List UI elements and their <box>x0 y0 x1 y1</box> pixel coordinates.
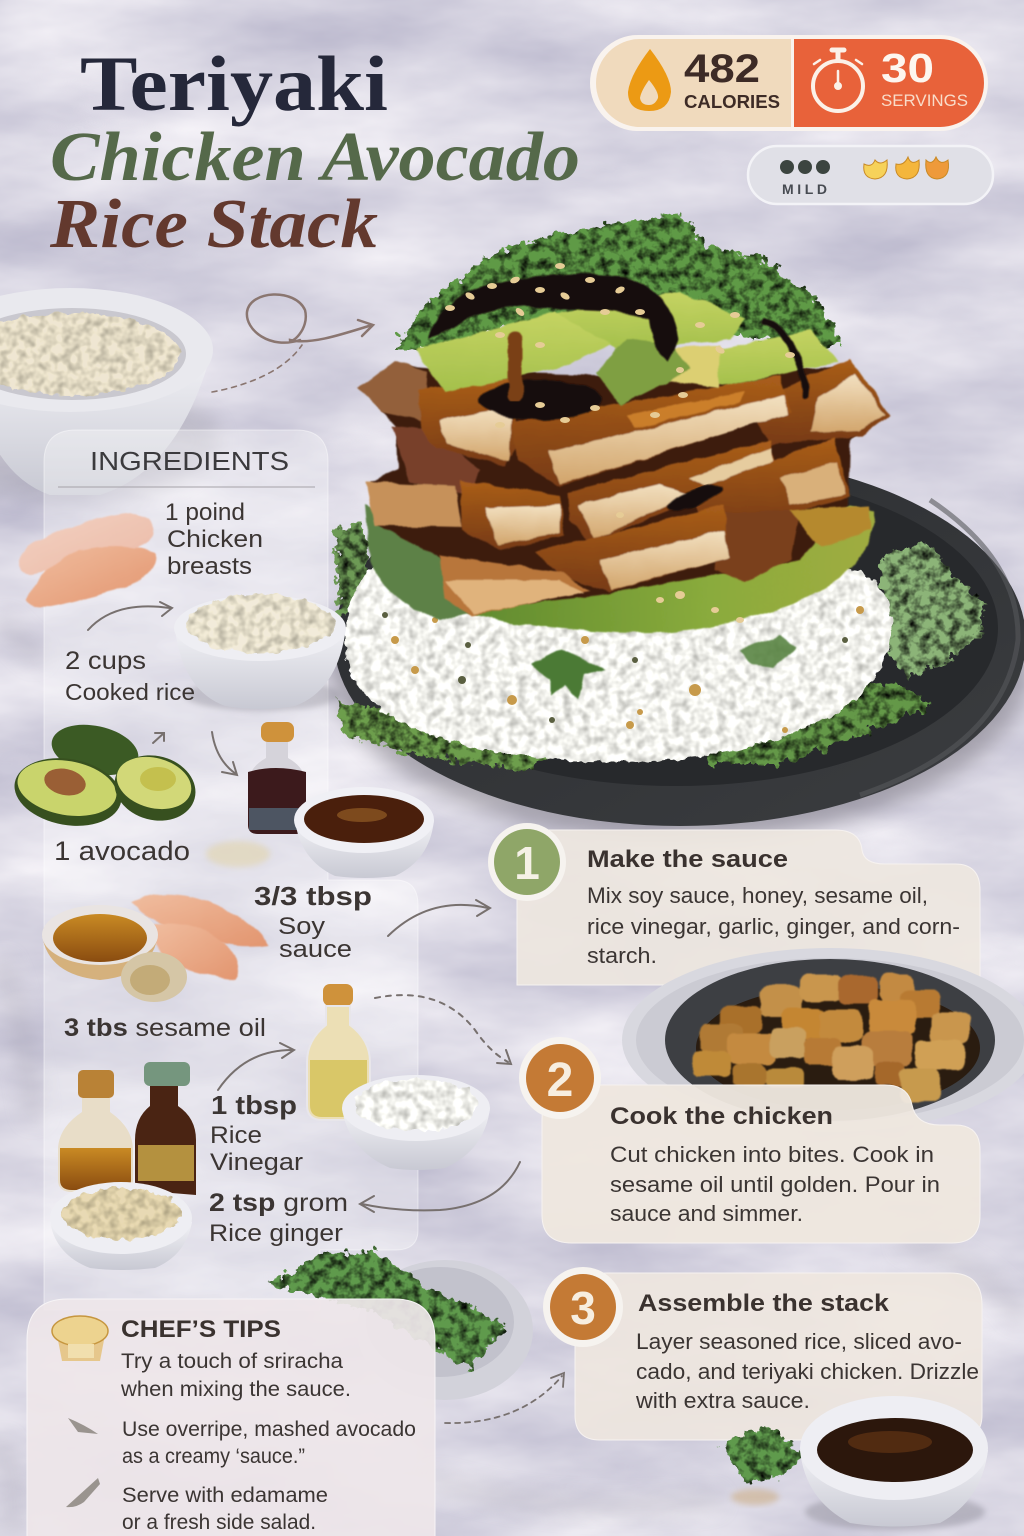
icon: stopwatch <box>813 50 863 111</box>
icon: avocados <box>9 717 203 834</box>
chicken stack <box>358 358 890 616</box>
middle layer pieces <box>366 482 462 528</box>
title: Rice Stack <box>49 186 378 263</box>
icon: bowl of rice <box>174 595 346 711</box>
teriyaki drizzle <box>428 274 806 395</box>
body: sauce and simmer. <box>610 1201 803 1226</box>
badge 1: 1 <box>514 837 540 889</box>
large piece, top layer <box>512 376 792 486</box>
icon: chicken and honey bowl <box>42 894 268 1002</box>
body: sesame oil until golden. Pour in <box>610 1172 940 1197</box>
icon: oil bottle <box>307 984 370 1120</box>
text: chicken breasts: Chicken <box>167 526 263 553</box>
heading: Assemble the stack <box>638 1290 890 1317</box>
text: rice vinegar <box>210 1090 303 1176</box>
text: soy sauce <box>254 881 372 963</box>
tip 1: Try a touch of sriracha <box>121 1350 343 1373</box>
rice mound <box>345 555 892 762</box>
herb crown <box>392 212 845 350</box>
text: cooked rice: 2 cups <box>65 647 146 675</box>
rice bowl, top left <box>0 288 220 500</box>
icon: flame <box>628 49 671 111</box>
text: sesame oil: 3 tbs sesame oil <box>64 1014 266 1042</box>
text: rice vinegar: Vinegar <box>210 1149 303 1176</box>
tip 3 <box>122 1484 328 1534</box>
tip 2: Use overripe, mashed avocado <box>122 1418 416 1441</box>
heading: Cook the chicken <box>610 1103 833 1130</box>
tip 3: Serve with edamame <box>122 1484 328 1507</box>
tip 2 <box>122 1418 416 1468</box>
calories value <box>684 47 780 112</box>
text: rice vinegar: Rice <box>210 1122 262 1149</box>
text: rice ginger: Rice ginger <box>209 1220 343 1247</box>
tip 3: or a fresh side salad. <box>122 1511 316 1534</box>
icon: sauce bowl <box>294 787 434 878</box>
servings value <box>881 45 968 110</box>
left piece, top layer <box>418 378 518 466</box>
arrow: oil to vinegar <box>218 1043 294 1090</box>
body <box>587 883 960 968</box>
badge 2 <box>519 1037 601 1119</box>
tip 1 <box>120 1350 351 1401</box>
sesame seeds <box>445 263 795 623</box>
green layer and avocado slice <box>365 505 480 620</box>
stat pill: calories and time <box>590 35 988 131</box>
badge 2: 2 <box>547 1054 573 1107</box>
panel: step 1 make the sauce <box>488 823 980 985</box>
tip 1: when mixing the sauce. <box>120 1378 351 1401</box>
body <box>610 1142 940 1226</box>
arrow: step 2 to ginger <box>360 1162 520 1212</box>
dish: teriyaki chicken avocado rice stack <box>335 212 985 772</box>
herb plate <box>265 1250 533 1400</box>
body: Cut chicken into bites. Cook in <box>610 1142 934 1167</box>
icon: pan of cooked chicken <box>622 948 1024 1132</box>
mild dots and label <box>780 160 830 197</box>
panel: ingredients background <box>44 430 418 1310</box>
body: rice vinegar, garlic, ginger, and corn- <box>587 914 960 939</box>
title <box>49 40 580 263</box>
spice pile <box>206 841 270 867</box>
arrows near avocado and soy bottle <box>153 732 237 775</box>
rice specks and herb flecks <box>382 606 864 733</box>
text: cooked rice: Cooked rice <box>65 679 195 705</box>
text: cooked rice <box>65 647 195 705</box>
icon: chef hat muffin <box>52 1316 108 1361</box>
icon: raw chicken breasts <box>18 512 155 607</box>
text: avocado: 1 avocado <box>54 836 190 866</box>
heading: chef's tips: CHEF’S TIPS <box>121 1316 281 1343</box>
text: soy sauce: 3/3 tbsp <box>254 881 372 911</box>
arrow: soy sauce to step 1 <box>388 900 490 936</box>
calories value: 482 <box>684 47 760 91</box>
background veins <box>0 620 1024 1536</box>
decorative loop arrow to the plate <box>212 294 373 392</box>
body: Mix soy sauce, honey, sesame oil, <box>587 883 928 908</box>
dark sauce pools <box>664 480 726 516</box>
heading: ingredients: INGREDIENTS <box>90 446 289 476</box>
text: rice ginger <box>209 1189 348 1247</box>
icon: sauce bowl with garnish <box>722 1396 988 1530</box>
arrow: chicken to rice <box>88 602 172 630</box>
text: chicken breasts: breasts <box>167 553 252 580</box>
main plate <box>330 454 1024 840</box>
text: soy sauce: Soy <box>278 913 325 940</box>
dashed arrow: tips to step 3 <box>445 1373 564 1423</box>
badge 3: 3 <box>570 1282 596 1334</box>
icon: soy sauce bottle <box>248 722 306 834</box>
text: rice vinegar: 1 tbsp <box>211 1090 297 1120</box>
spice level pill <box>748 146 993 204</box>
body: Layer seasoned rice, sliced avo- <box>636 1329 962 1354</box>
plate garnish herbs <box>335 525 985 772</box>
title: Chicken Avocado <box>50 119 580 196</box>
badge 3 <box>543 1267 623 1347</box>
text: chicken breasts <box>165 499 263 580</box>
icon: leaf <box>68 1418 98 1434</box>
icon: salt bowl <box>342 1075 490 1170</box>
icon: vinegar and sesame oil bottles <box>58 1062 196 1195</box>
calories value: CALORIES <box>684 92 780 112</box>
bottom layer pieces <box>715 510 800 582</box>
right piece, top layer <box>745 358 890 445</box>
icon: sesame bowl <box>50 1182 192 1270</box>
tip 2: as a creamy ‘sauce.” <box>122 1445 305 1468</box>
heading: Make the sauce <box>587 846 788 873</box>
dashed arrow: oil to step 2 <box>375 995 511 1064</box>
servings value: SERVINGS <box>881 91 968 110</box>
body: cado, and teriyaki chicken. Drizzle <box>636 1359 979 1384</box>
body <box>635 1329 979 1413</box>
back left piece <box>358 360 428 422</box>
text: rice ginger: 2 tsp grom <box>209 1189 348 1217</box>
body: with extra sauce. <box>635 1388 810 1413</box>
title: Teriyaki <box>80 40 388 127</box>
badge 1 <box>488 823 566 901</box>
text: soy sauce: sauce <box>279 936 352 963</box>
avocado slices <box>415 292 838 405</box>
body: starch. <box>587 943 657 968</box>
icon: three flames <box>864 157 949 179</box>
icon: spoon <box>66 1478 100 1507</box>
mild dots and label: MILD <box>782 181 827 197</box>
servings value: 30 <box>881 45 934 91</box>
panel: step 2 cook the chicken <box>519 1037 980 1243</box>
text: chicken breasts: 1 poind <box>165 499 245 526</box>
panel: chef's tips <box>27 1299 435 1536</box>
panel: step 3 assemble the stack <box>543 1267 982 1440</box>
